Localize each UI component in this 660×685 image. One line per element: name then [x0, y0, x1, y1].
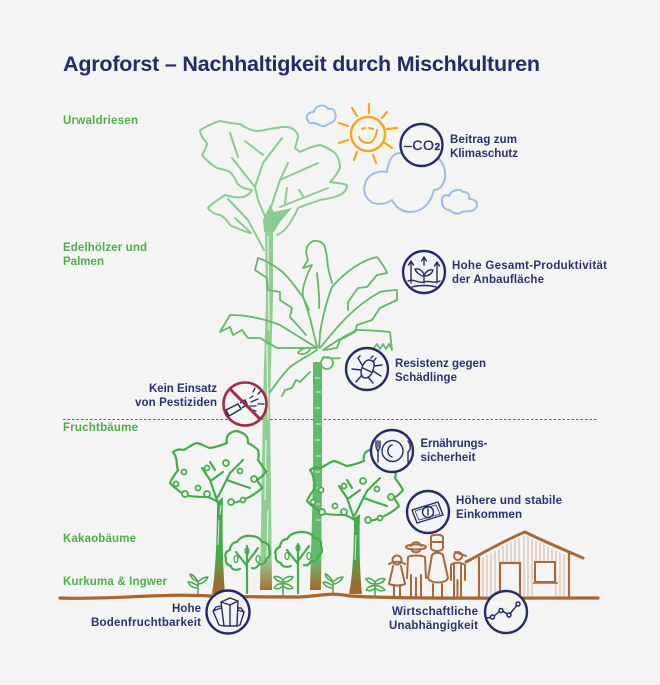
text: Resistenz: Resistenz gegen: [395, 358, 486, 370]
title: Agroforst – Nachhaltigkeit durch Mischkulturen: [63, 52, 540, 76]
icon: CO2: [400, 124, 442, 166]
text: Resistenz: [395, 358, 486, 384]
text: no pesticides: von Pestiziden: [135, 397, 217, 409]
father: [406, 542, 426, 596]
cocoa tree right: [275, 532, 322, 593]
text: no pesticides: Kein Einsatz: [149, 383, 217, 395]
text: Wirtschaftliche Unabhängigkeit: Wirtschaftliche: [392, 606, 478, 618]
fruit tree left: [170, 431, 266, 594]
family: [389, 535, 466, 596]
ground line: [60, 594, 598, 598]
label: Edelhölzer und Palmen: Edelhölzer und: [63, 242, 147, 254]
label: Kurkuma und Ingwer: Kurkuma & Ingwer: [63, 576, 168, 588]
label: Kakaobäume: Kakaobäume: [63, 533, 136, 545]
text: Gesamt-Produktivität: [452, 260, 607, 286]
text: Bodenfruchtbarkeit: Bodenfruchtbarkeit: [91, 617, 201, 629]
seedlings: [188, 574, 385, 595]
text: Einkommen: Höhere und stabile: [456, 495, 562, 507]
tall tree: [200, 121, 347, 590]
mother: [428, 535, 448, 596]
icon: productivity: [403, 251, 445, 293]
fruit tree right: [307, 449, 403, 594]
text: Ernährungssicherheit: Ernährungs-: [420, 438, 488, 450]
text: Wirtschaftliche Unabhängigkeit: Unabhängigkeit: [389, 620, 478, 632]
text: Beitrag zum Klimaschutz: Klimaschutz: [450, 148, 518, 160]
icon: line graph: [485, 591, 527, 633]
text: Beitrag zum Klimaschutz: Beitrag zum: [450, 134, 517, 146]
girl: [389, 556, 405, 596]
text: Bodenfruchtbarkeit: Hohe: [172, 603, 201, 615]
text: Ernährungssicherheit: [420, 438, 488, 464]
icon: no pesticides: [224, 382, 266, 426]
icon: beetle: [346, 348, 388, 390]
label: Edelhölzer und Palmen: [63, 242, 147, 268]
icon: CO2: –CO2: [404, 137, 440, 153]
house: [466, 532, 583, 597]
label: Fruchtbäume: Fruchtbäume: [63, 422, 138, 434]
text: Bodenfruchtbarkeit: [91, 603, 201, 629]
text: Gesamt-Produktivität: der Anbaufläche: [452, 274, 544, 286]
label: Urwaldriesen: Urwaldriesen: [63, 115, 138, 127]
text: no pesticides: [135, 383, 217, 409]
boy: [451, 552, 466, 596]
text: Resistenz: Schädlinge: [395, 372, 457, 384]
label: Edelhölzer und Palmen: Palmen: [63, 256, 104, 268]
text: Wirtschaftliche Unabhängigkeit: [389, 606, 478, 632]
text: Gesamt-Produktivität: Hohe Gesamt-Produktivität: [452, 260, 607, 272]
layer labels: [63, 115, 168, 588]
icon: crystals: [206, 590, 250, 634]
cocoa tree left: [225, 536, 270, 593]
clouds: [307, 105, 477, 214]
icon: banknote: [407, 491, 449, 533]
text: Beitrag zum Klimaschutz: [450, 134, 518, 160]
sun: [339, 104, 397, 163]
palm tree: [220, 241, 397, 590]
icon: plate: [371, 430, 413, 472]
text: Einkommen: [456, 495, 562, 521]
text: Ernährungssicherheit: sicherheit: [420, 452, 476, 464]
text: Einkommen: Einkommen: [456, 509, 522, 521]
